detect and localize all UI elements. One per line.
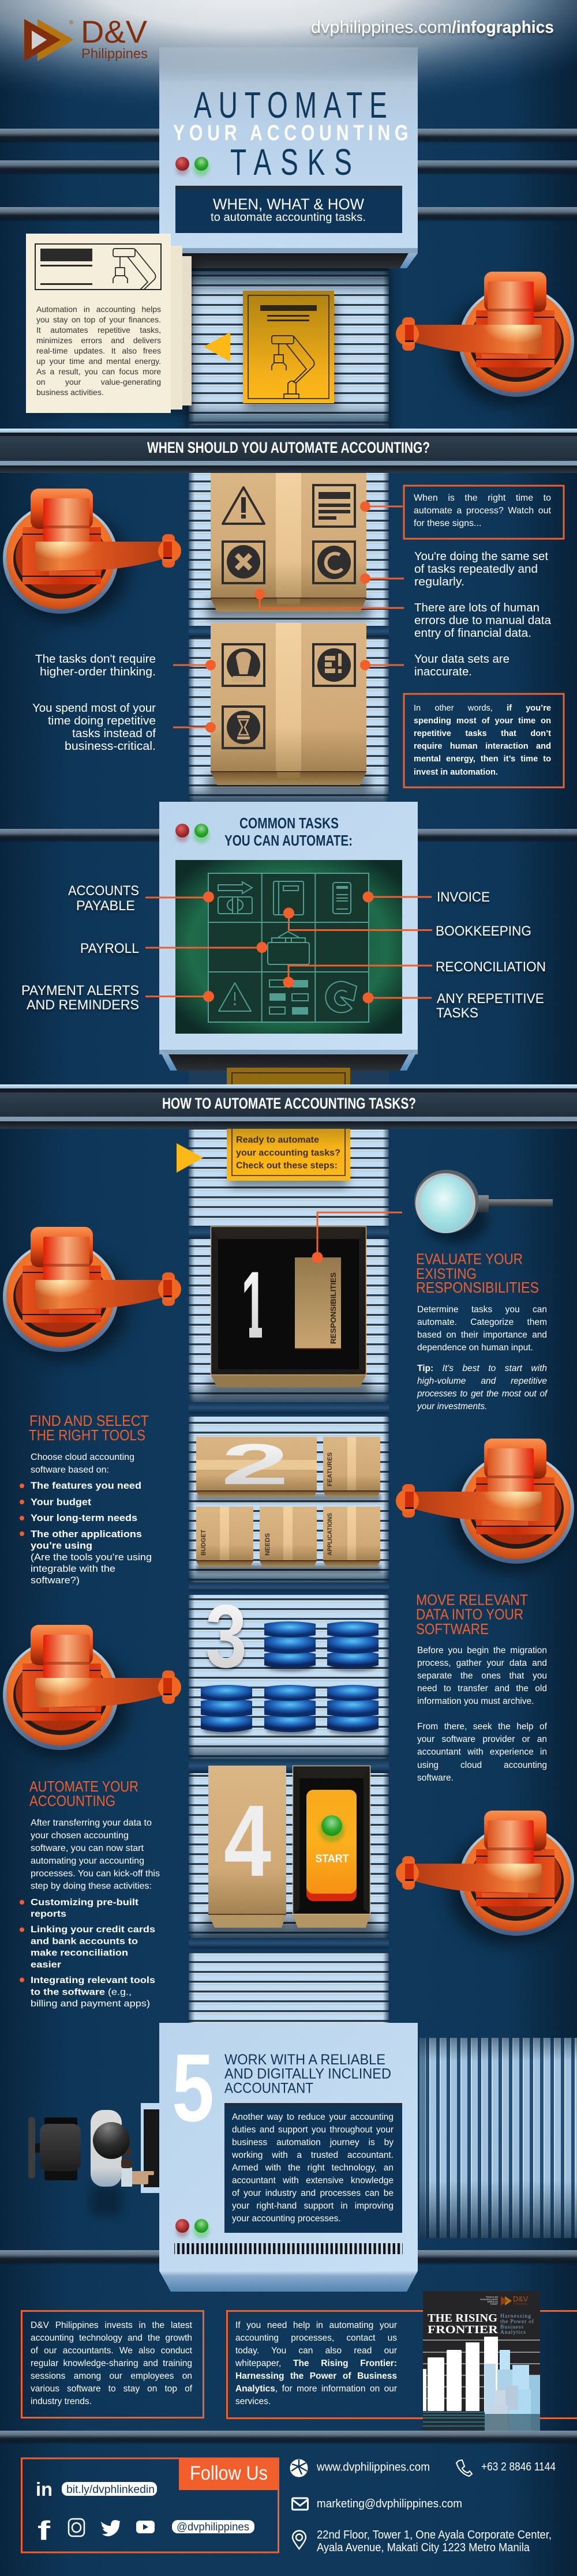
linkedin [36,2479,157,2500]
text: intro paragraph: minimizes errors and delivers [36,336,161,345]
vent [174,2243,403,2254]
text: intro paragraph: It automates repetitive tasks, [36,325,161,335]
indicator lights [175,157,209,177]
cover title: Business [500,2325,523,2330]
step 4: heading and text: to the software [31,1988,105,1997]
common tasks labels: INVOICE [437,889,490,905]
cover small logo: “Finance and [486,2296,498,2298]
contact details: +63 2 8846 1144 [481,2461,556,2473]
text: work with accountant description: your right-hand support in improving [232,2201,394,2211]
step 4: heading and text: reports [31,1909,66,1919]
roller pipe behind step 5 machine [0,2250,577,2265]
step 2: find and select tools text: software based on: [31,1465,109,1475]
text: intro paragraph: business activities. [36,388,104,397]
text: D&V commitment [31,2320,193,2406]
robotic stamp arm [396,272,574,405]
text: work with accountant description: Armed with the right technology, an [232,2163,394,2173]
text: D&V commitment: accounting technology and the growth [31,2333,192,2343]
step 4: heading and text [20,1778,160,2008]
step 2: find and select tools text: Choose cloud accounting [31,1452,134,1462]
icon: invoice [333,883,351,914]
roller pipes behind header machine [0,129,577,222]
step 3: heading [416,1591,528,1638]
text: in other words callout: spending most of your time on [414,716,551,726]
step 1: open box with number and tag [208,1212,402,1396]
text: evaluate description [417,1305,547,1353]
robotic stamp arm [3,1227,181,1361]
step 4: heading and text: your chosen accounting [31,1831,129,1841]
step 4: open box with start button [290,1766,373,1933]
icon: twitter [101,2520,120,2536]
step 2: find and select tools text: Your long-term needs [31,1512,137,1523]
roller pipe behind common tasks machine [0,829,577,843]
contact details: marketing@dvphilippines.com [317,2498,462,2510]
heading: common tasks: COMMON TASKS [239,814,339,832]
callout frames [404,486,564,787]
section band: when should you automate [0,429,577,473]
yellow sign top under machine [227,1068,350,1084]
step number 5: 5 [172,2034,214,2142]
text: contact us and whitepaper: whitepaper, The Rising Frontier: [235,2359,397,2368]
icon: hourglass [223,707,264,748]
robotic stamp arm [396,1811,574,1944]
section band: how to automate: HOW TO AUTOMATE ACCOUNTING TASKS? [162,1095,416,1112]
heading: work with a reliable accountant [224,2052,391,2096]
text box background [224,2103,402,2233]
conveyor belts [186,266,392,2025]
text: work with accountant description: of your industry and processes can be [232,2188,394,2198]
signs text: You're doing the same set [414,550,548,563]
text: in other words callout: invest in automation. [414,768,498,777]
indicator lights [175,824,209,843]
step 4: heading and text: billing and payment apps) [31,1999,150,2008]
icon: document [313,485,355,527]
website url [311,18,554,37]
text: work with accountant description: Another way to reduce your accounting [232,2112,394,2122]
text: move data description: need to transfer and the old [417,1684,547,1693]
text: D&V commitment: sessions among our employees on [31,2371,192,2381]
robotic stamp arm [3,489,181,622]
signs text: Your data sets are [414,653,509,666]
common tasks labels: TASKS [436,1005,478,1021]
box: applications: APPLICATIONS [327,1513,334,1556]
illustration: accountant at desk seen from above [28,2103,159,2215]
icon: warning triangle [223,487,264,524]
step 4: closed box with number [205,1766,289,1933]
subtitle box [175,186,402,233]
icon: globe [290,2459,308,2477]
icon: alert triangle [219,983,251,1011]
box: applications [323,1507,380,1567]
text: seek help description: using cloud accounting [417,1760,547,1770]
text: intro paragraph: real-time updates. It also frees [36,346,161,355]
step 4: heading and text: Customizing pre-built [31,1898,139,1907]
step 4: heading and text: Linking your credit cards [31,1925,155,1935]
step 4: heading and text: After transferring your data to [31,1818,152,1828]
common tasks connectors [145,892,432,1004]
step 4: closed box with number: 4 [224,1785,271,1898]
start button [306,1790,357,1901]
step 1: open box with number and tag: 1 [241,1252,267,1358]
section band: how to automate [0,1084,577,1129]
step 4: heading and text: and bank accounts to [31,1937,138,1946]
text: intro paragraph: Automation in accounting helps [36,305,161,314]
text: work with accountant description: accountant with extensive knowledge [232,2176,394,2186]
common tasks labels: PAYROLL [80,941,139,956]
text: in other words callout: repetitive tasks that don’t [414,729,551,738]
heading: automate your accounting tasks: AUTOMATE [194,85,394,126]
heading: work with a reliable accountant: AND DIGITALLY INCLINED [224,2066,391,2082]
frame: D&V commitment [22,2311,203,2418]
cover title [428,2312,534,2336]
text: right time callout [414,493,551,528]
icon: youtube [136,2521,155,2533]
step 4: heading and text: make reconciliation [31,1948,128,1958]
step 2: find and select tools text: (Are the tools you’re using [31,1552,152,1563]
cardboard box with warning signs [208,473,369,619]
step 2: find and select tools text: integrable with the [31,1564,115,1574]
icon: data alert [313,644,355,686]
intro paper stack [26,234,196,414]
heading: automate your accounting tasks [173,85,413,183]
text: right time callout: When is the right time to [414,493,551,503]
text: contact us and whitepaper [235,2320,397,2406]
callout connectors for automation signs [173,501,404,733]
text: evaluate description: based on their importance and [417,1330,547,1340]
follow us tab [179,2457,279,2490]
text: D&V commitment: industry trends. [31,2397,92,2406]
step 3: number and database stacks [201,1586,379,1735]
text: move data description: information you must archive. [417,1696,534,1706]
step 3: heading: DATA INTO YOUR [416,1606,523,1623]
contact details: Ayala Avenue, Makati City 1223 Metro Manila [317,2541,530,2554]
contact details: www.dvphilippines.com [316,2461,430,2473]
signs text: errors due to manual data [414,614,552,627]
box: needs [260,1507,317,1567]
follow us panel [22,2457,279,2552]
text: evaluate description: dependence on human input. [417,1343,533,1353]
box: needs: NEEDS [264,1533,271,1556]
text: move data description [417,1646,547,1706]
step 4: heading and text: processes. You can kick-off this [31,1869,160,1879]
text: in other words callout [414,704,551,777]
text: evaluate tip: processes to get the most out of [417,1389,547,1399]
panel: header machine [159,47,418,268]
signs text [32,550,552,753]
contact details [290,2459,556,2554]
green screen with task icon grid [175,860,402,1034]
text: evaluate tip [417,1364,548,1411]
linkedin: in [36,2479,53,2500]
yellow poster with robot arm [243,291,338,410]
text: seek help description: software. [417,1773,454,1783]
text: contact us and whitepaper: today. You can also read our [235,2346,397,2356]
indicator lights [175,2219,209,2239]
icon: repeat [313,542,355,583]
text: work with accountant description: duties and support you throughout your [232,2125,394,2135]
text: in other words callout: mental energy, then it’s time to [414,754,551,764]
icon: location pin [293,2531,306,2549]
cover title: FRONTIER [428,2323,499,2336]
start button: START [315,1853,349,1865]
common tasks labels: ACCOUNTS [68,883,139,899]
step 2: boxes with number and labels [196,1432,381,1572]
box: number 2: 2 [221,1432,289,1497]
step 4: heading and text: ACCOUNTING [29,1792,115,1809]
step 3: heading: SOFTWARE [416,1620,489,1638]
contact details: 22nd Floor, Tower 1, One Ayala Corporate Center, [317,2529,552,2541]
website url: dvphilippines.com [311,18,452,37]
text: intro paragraph: you stay on top of your finances. [36,315,161,324]
signs text: tasks instead of [72,727,156,740]
signs text: higher-order thinking. [40,666,156,678]
heading: automate your accounting tasks: YOUR ACCOUNTING [173,121,413,145]
text: in other words callout: In other words, if you’re [414,704,551,713]
vertical blinds [419,2038,577,2238]
tag: responsibilities [295,1257,341,1349]
signs text: The tasks don't require [35,653,156,666]
signs text: business-critical. [65,740,156,753]
robotic stamp arm [396,1439,574,1572]
text: D&V commitment: various software to stay on top of [31,2384,192,2394]
step 2: find and select tools text: software?) [31,1575,80,1586]
heading: common tasks: YOU CAN AUTOMATE: [224,832,353,849]
step 2: find and select tools text: The other applications [31,1529,142,1539]
cover title: Analytics [500,2330,526,2335]
person [91,2110,154,2187]
common tasks labels: ANY REPETITIVE [437,991,544,1007]
whitepaper book cover [423,2291,540,2431]
step 2: find and select tools text: you’re using [31,1540,92,1551]
step 2: find and select tools text: THE RIGHT TOOLS [29,1426,145,1444]
logo: D&V Philippines [24,14,148,62]
icon: phone [456,2460,472,2476]
text: evaluate your existing responsibilities heading: RESPONSIBILITIES [416,1279,539,1296]
card illustration [35,244,161,311]
text: D&V commitment: of our accountants. We also conduct [31,2346,192,2356]
text: evaluate your existing responsibilities heading [416,1251,539,1296]
cover title: THE RISING [428,2312,497,2325]
step 2: find and select tools text: FIND AND SELECT [29,1412,149,1429]
step 3: heading: MOVE RELEVANT [416,1591,528,1608]
yellow sign: ready to automate [227,1129,350,1188]
icon: instagram [69,2519,84,2536]
heading: automate your accounting tasks: TASKS [230,142,361,183]
text: contact us and whitepaper: Harnessing the Power of Business [235,2371,397,2381]
text: contact us and whitepaper: accounting processes, contact us [235,2333,397,2343]
text: evaluate tip: Tip: It's best to start with [417,1364,547,1373]
text: seek help description: From there, seek the help of [417,1722,547,1732]
handle pill: @dvphilippines [177,2521,249,2533]
monitor [141,2103,159,2193]
step 4: heading and text: (e.g., [108,1988,132,1997]
yellow sign: ready to automate: Check out these steps: [236,1161,338,1171]
box: number 2 [196,1432,317,1497]
cover small logo: Accounting experts [480,2298,498,2300]
text: move data description: separate the ones that you [417,1671,547,1681]
icon: payable arrow and card [218,882,252,893]
common tasks labels: BOOKKEEPING [436,923,531,939]
bottom pipe [0,2431,577,2444]
text: right time callout: automate a process? Watch out [414,505,551,516]
common tasks labels: PAYABLE [76,898,135,914]
text: intro paragraph [36,305,161,397]
icon: wallet [268,932,309,964]
text: right time callout: for these signs... [414,518,481,528]
icon: repeat [325,982,357,1013]
text: D&V commitment: regular knowledge-sharing and training [31,2359,192,2368]
subtitle box: WHEN, WHAT & HOW [213,196,364,213]
text: seek help description: your software provider or an [417,1734,547,1744]
text: contact us and whitepaper: services. [235,2397,271,2406]
cover title: Harnessing [500,2314,531,2319]
text: seek help description: accountant with experience in [417,1747,547,1757]
logo: D&V Philippines: ® [69,20,74,26]
signs text: of tasks repeatedly and [414,563,538,576]
robotic stamp arm [3,1625,181,1759]
signs text: regularly. [414,576,464,588]
text: contact us and whitepaper: Analytics, for more information on our [235,2384,397,2394]
text: intro paragraph: As a result, you can focus more [36,367,161,376]
text: intro paragraph: up your time and mental energy. [36,356,161,366]
frame: contact and whitepaper [227,2311,577,2418]
text: work with accountant description: working with a trusted accountant. [232,2150,394,2160]
box: budget [196,1507,253,1567]
arrow pointing to intro card [204,332,230,362]
chair [28,2117,81,2180]
subtitle box: to automate accounting tasks. [211,211,366,224]
step 4: heading and text: software, you can now start [31,1843,144,1853]
cover small logo: leading you [488,2300,498,2303]
box: features [323,1437,380,1497]
common tasks labels: RECONCILIATION [436,959,546,975]
logo: D&V Philippines: D&V [81,14,147,50]
step 2: find and select tools text [20,1412,152,1586]
text: contact us and whitepaper: If you need help in automating your [235,2320,397,2330]
icon: mail [292,2498,308,2510]
step 2: find and select tools text: Your budget [31,1496,91,1508]
icon: book [273,881,304,915]
text: evaluate description: Determine tasks you can [417,1305,547,1315]
text: evaluate description: automate. Categorize them [417,1317,547,1327]
icon: facebook: f [38,2515,51,2545]
text: work with accountant description: your accounting processes. [232,2214,341,2224]
linkedin: bit.ly/dvphlinkedin [66,2484,155,2496]
text: work with accountant description [232,2112,394,2224]
text: intro paragraph: on your value-generating [36,377,161,386]
box: budget: BUDGET [200,1530,207,1556]
icon: reconciliation blocks [269,886,348,1015]
text: move data description: process, gather your data and [417,1658,547,1668]
text: evaluate your existing responsibilities heading: EXISTING [416,1265,477,1282]
cardboard box with more signs [208,623,369,794]
text: work with accountant description: business automation journey is by [232,2138,394,2147]
icon: error cross [223,542,264,583]
website url: /infographics [452,18,554,37]
step 4: heading and text: AUTOMATE YOUR [29,1778,138,1795]
step 3: number and database stacks: 3 [205,1586,247,1686]
cover title: the Power of [500,2319,534,2325]
text: evaluate tip: your investments. [417,1402,487,1411]
step 4: heading and text: Integrating relevant tools [31,1976,155,1985]
common tasks labels [21,883,546,1021]
yellow sign: ready to automate: your accounting tasks? [236,1148,340,1158]
signs text: There are lots of human [414,602,539,614]
signs text: time doing repetitive [48,715,156,727]
tag: responsibilities: RESPONSIBILITIES [329,1272,338,1344]
follow us tab: Follow Us [190,2462,268,2484]
step 4: heading and text: easier [31,1960,61,1970]
cover small logo: Philippines [514,2303,529,2305]
box: features: FEATURES [327,1452,334,1486]
icon: person [223,644,264,686]
signs text: inaccurate. [414,666,472,678]
step 4: heading and text: automating your accounting [31,1856,144,1866]
text: evaluate tip: high-volume and repetitive [417,1376,547,1386]
heading: work with a reliable accountant: ACCOUNTANT [224,2080,313,2096]
heading: work with a reliable accountant: WORK WITH A RELIABLE [224,2052,385,2068]
signs text: You spend most of your [32,702,156,715]
signs text: entry of financial data. [414,627,531,640]
cover small logo [480,2295,529,2305]
text: move data description: Before you begin the migration [417,1646,547,1655]
common tasks labels: PAYMENT ALERTS [21,983,139,998]
panel: common tasks machine [159,802,418,1071]
logo: D&V Philippines: Philippines [81,46,148,62]
cover small logo: forward” [490,2303,499,2305]
section band: when should you automate: WHEN SHOULD YOU AUTOMATE ACCOUNTING? [147,439,430,456]
text: D&V commitment: D&V Philippines invests in the latest [31,2320,192,2330]
arrow pointing to sign [177,1143,203,1173]
panel: step 5 machine [159,2023,418,2292]
icon: magnifying glass [414,1170,553,1243]
text: seek help description [417,1722,547,1783]
common tasks labels: AND REMINDERS [27,997,139,1013]
step 4: heading and text: step by doing these activities: [31,1882,152,1891]
text: in other words callout: require human interaction and [414,742,551,751]
cover small logo: D&V [513,2295,528,2303]
heading: common tasks [224,814,353,849]
text: evaluate your existing responsibilities heading: EVALUATE YOUR [416,1251,523,1268]
step 2: find and select tools text: The features you need [31,1480,141,1491]
yellow sign: ready to automate: Ready to automate [236,1135,319,1145]
